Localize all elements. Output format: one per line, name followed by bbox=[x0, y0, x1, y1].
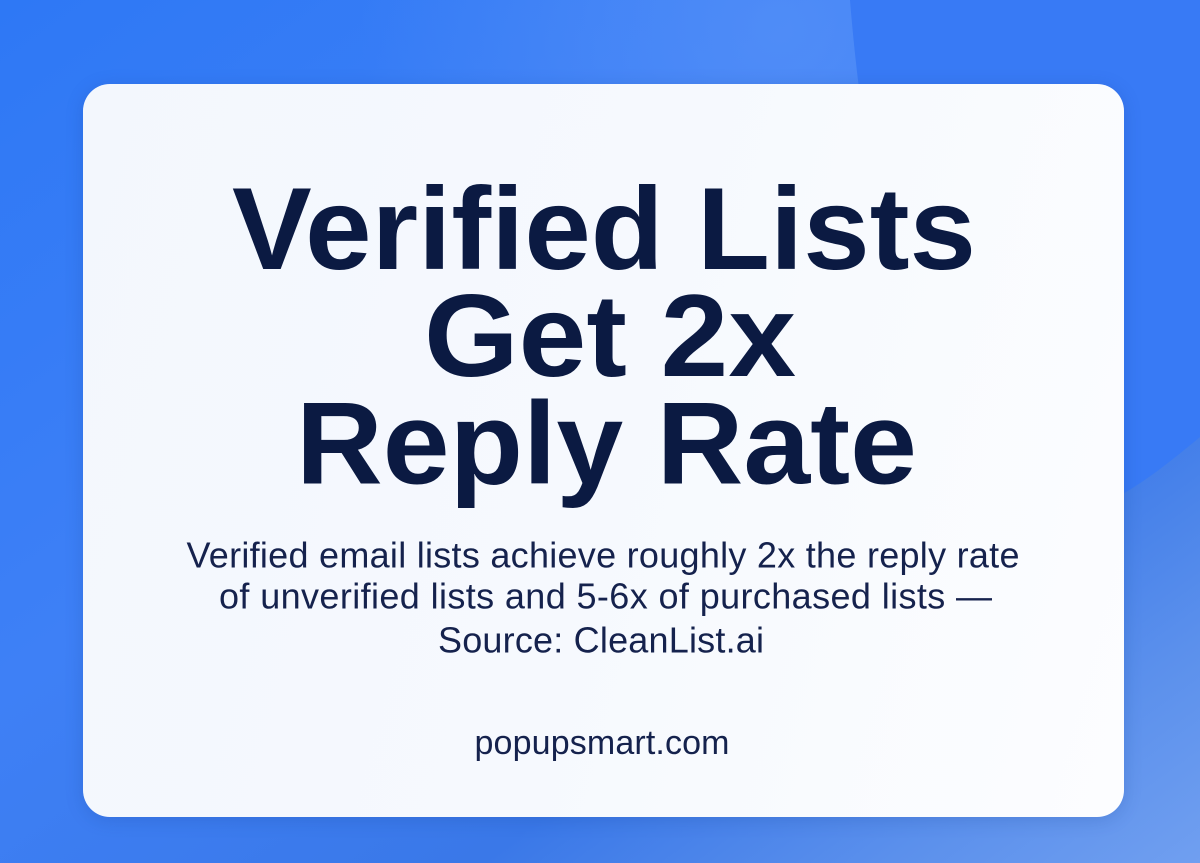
panel: card bbox=[83, 84, 1124, 817]
title bbox=[232, 163, 976, 508]
title: Get 2x bbox=[424, 270, 796, 401]
title: Reply Rate bbox=[296, 378, 917, 508]
title: Verified Lists bbox=[232, 163, 976, 294]
description text: Source: CleanList.ai bbox=[438, 620, 764, 660]
description text: Verified email lists achieve roughly 2x the reply rate bbox=[186, 534, 1020, 576]
website: popupsmart.com bbox=[474, 724, 730, 762]
description text: of unverified lists and 5-6x of purchased lists — bbox=[219, 576, 992, 616]
decorative blob bbox=[850, 0, 1200, 515]
description text bbox=[186, 534, 1020, 660]
